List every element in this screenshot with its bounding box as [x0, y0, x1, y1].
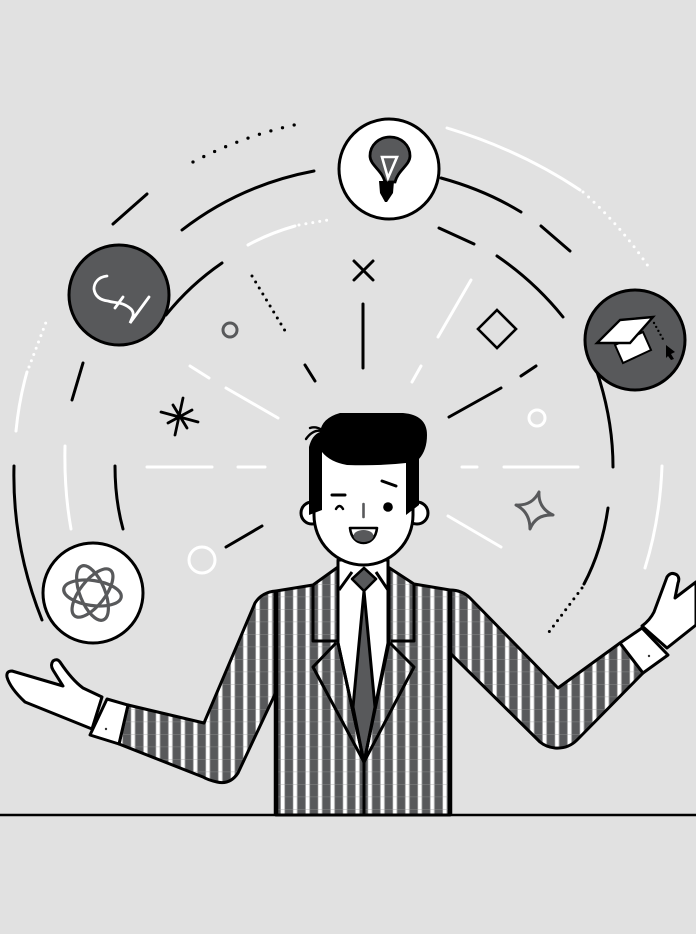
tie knot — [352, 568, 376, 591]
right hand — [642, 573, 696, 648]
face features — [332, 481, 396, 543]
juggled icon: graduation cap — [585, 290, 685, 390]
right sleeve — [450, 590, 643, 748]
icon: small grey circle — [223, 323, 237, 337]
icon: small white circle — [529, 410, 545, 426]
orbit lines: black — [14, 171, 613, 620]
juggled icon: light bulb — [339, 119, 439, 219]
left cuff — [90, 699, 128, 744]
ground line — [0, 814, 696, 816]
lapels — [313, 567, 414, 815]
man — [7, 413, 696, 815]
icon: large white circle — [189, 547, 215, 573]
face — [314, 450, 413, 565]
left sleeve — [119, 591, 276, 783]
icon: diamond — [478, 310, 516, 348]
juggled icon: atom — [43, 543, 143, 643]
left hand — [7, 660, 102, 729]
hair tuft — [306, 427, 322, 439]
icon: cross — [354, 261, 373, 280]
radiating lines — [147, 280, 578, 547]
orbit lines: dotted — [29, 124, 648, 632]
right cuff — [620, 628, 668, 673]
orbit lines: white — [16, 128, 662, 568]
ears — [301, 502, 428, 524]
icon: asterisk — [161, 398, 198, 435]
hair — [309, 413, 427, 515]
juggled icon: pound sign — [69, 245, 169, 345]
jacket body — [276, 567, 450, 815]
collar — [339, 572, 388, 590]
shirt — [338, 560, 388, 762]
icon: four-point star — [516, 492, 553, 529]
tie — [353, 591, 375, 763]
